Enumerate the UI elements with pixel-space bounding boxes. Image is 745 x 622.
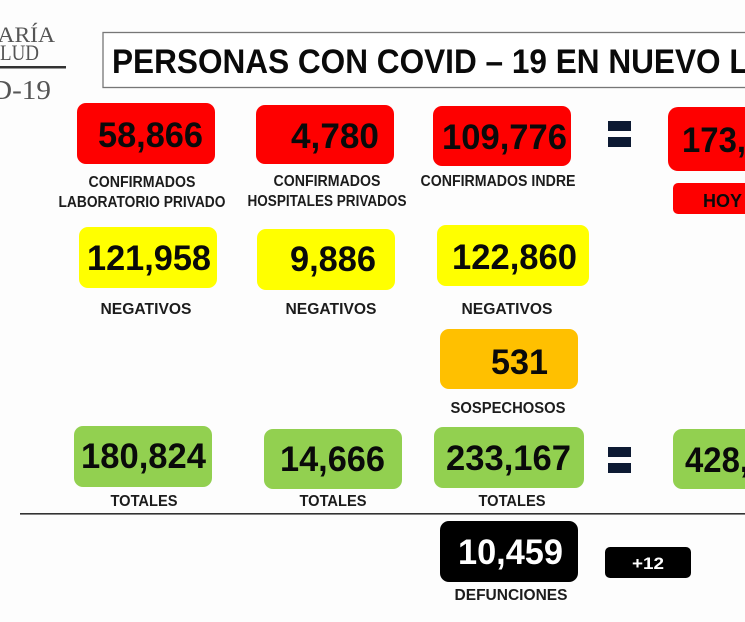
totals indre: 233,167 — [446, 439, 571, 478]
equals sign, confirmed — [608, 121, 631, 147]
confirmed private hospitals — [248, 105, 406, 210]
totals private laboratory: 180,824 — [81, 437, 207, 476]
deaths: DEFUNCIONES — [454, 587, 568, 604]
new deaths badge — [605, 547, 691, 578]
suspected: SOSPECHOSOS — [450, 400, 566, 417]
confirmed indre: 109,776 — [442, 118, 567, 157]
deaths — [440, 521, 578, 604]
deaths: 10,459 — [458, 533, 563, 572]
today badge: HOY — [703, 191, 742, 211]
totals private laboratory — [74, 426, 212, 510]
confirmed private hospitals: HOSPITALES PRIVADOS — [248, 193, 406, 210]
negatives private laboratory — [79, 227, 217, 318]
today badge — [673, 183, 745, 214]
totals indre — [434, 427, 584, 510]
suspected — [440, 329, 578, 417]
confirmed total — [668, 107, 745, 171]
suspected: 531 — [491, 343, 548, 382]
equals sign, totals — [608, 447, 631, 473]
totals private laboratory: TOTALES — [110, 493, 178, 510]
totals private hospitals: 14,666 — [280, 440, 385, 479]
grand total — [673, 429, 745, 489]
confirmed private laboratory — [58, 103, 226, 211]
confirmed private hospitals: 4,780 — [291, 117, 379, 156]
negatives private hospitals — [257, 229, 395, 318]
logo: secretaría de salud covid-19 — [0, 22, 66, 105]
confirmed indre: CONFIRMADOS INDRE — [420, 173, 576, 190]
confirmed private laboratory: LABORATORIO PRIVADO — [58, 194, 226, 211]
confirmed private laboratory: 58,866 — [98, 116, 203, 155]
totals private hospitals — [264, 429, 402, 510]
negatives indre — [437, 225, 589, 318]
totals private hospitals: TOTALES — [300, 493, 366, 510]
negatives private laboratory: 121,958 — [87, 239, 211, 278]
confirmed private laboratory: CONFIRMADOS — [88, 174, 196, 191]
negatives private hospitals: NEGATIVOS — [286, 301, 376, 318]
negatives private hospitals: 9,886 — [290, 240, 376, 279]
totals indre: TOTALES — [478, 493, 546, 510]
confirmed private hospitals: CONFIRMADOS — [274, 173, 380, 190]
confirmed indre — [420, 106, 576, 190]
title — [103, 32, 745, 88]
negatives private laboratory: NEGATIVOS — [100, 301, 192, 318]
negatives indre: NEGATIVOS — [462, 301, 552, 318]
new deaths badge: +12 — [632, 554, 664, 573]
logo: secretaría de salud covid-19: LUD — [0, 40, 39, 65]
negatives indre: 122,860 — [452, 238, 577, 277]
